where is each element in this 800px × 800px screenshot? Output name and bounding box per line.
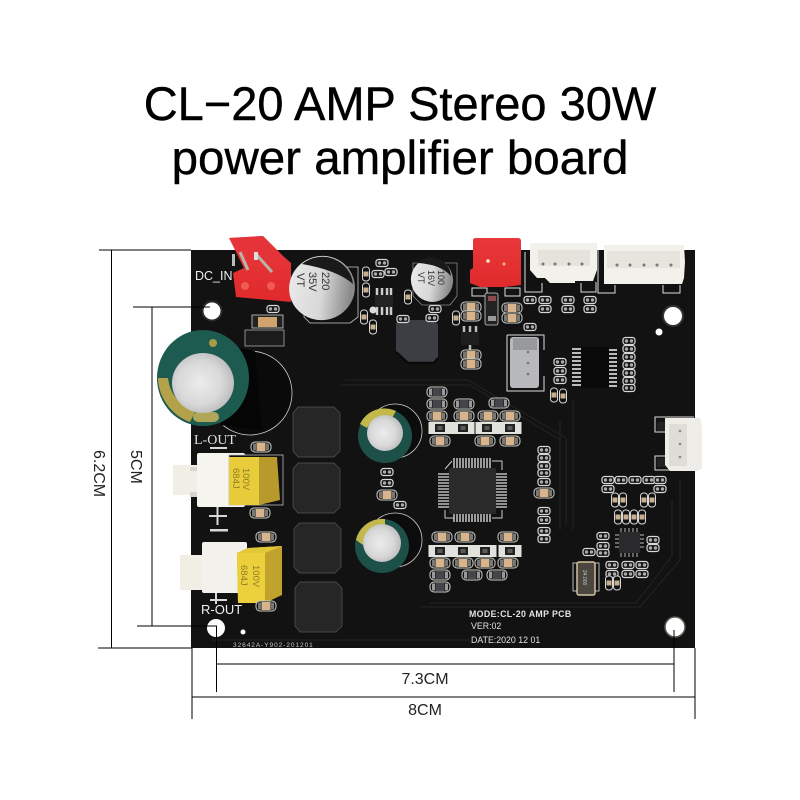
capacitor: 100uF 16V: VT bbox=[416, 272, 426, 284]
chip: crystal oscillator bbox=[573, 562, 599, 595]
panel: circuit board bbox=[157, 236, 702, 649]
capacitor: large green electrolytic bbox=[157, 330, 292, 435]
silkscreen: model block: MODE:CL-20 AMP PCB bbox=[469, 609, 572, 619]
diode and resistor below DC_IN bbox=[245, 306, 284, 346]
dimension: 5CM hole spacing: 5CM bbox=[127, 450, 144, 484]
capacitor: 220uF 35V: VT bbox=[294, 273, 306, 287]
capacitor: 100uF 16V bbox=[406, 253, 458, 307]
silkscreen: serial number: 32642A-Y902-201201 bbox=[233, 642, 314, 649]
title bbox=[144, 77, 657, 185]
SMD parts: upper amplifier cluster bbox=[427, 387, 522, 446]
silkscreen: model block: DATE:2020 12 01 bbox=[471, 635, 540, 645]
title: CL−20 AMP Stereo 30W bbox=[144, 77, 657, 130]
dimension: 5CM hole spacing bbox=[127, 307, 217, 626]
connector: white 4-pin bbox=[525, 243, 597, 292]
dimension: 7.3CM hole spacing bbox=[216, 626, 674, 692]
connector: right white 3-pin bbox=[655, 417, 702, 471]
capacitor: 220uF 35V: 35V bbox=[306, 272, 318, 292]
dimension: 7.3CM hole spacing: 7.3CM bbox=[401, 671, 449, 688]
output connector: R-OUT: 684J bbox=[238, 565, 249, 586]
output connector: L-OUT: 100V bbox=[240, 468, 251, 491]
title: power amplifier board bbox=[172, 132, 628, 185]
silkscreen: R-OUT label: R-OUT bbox=[201, 602, 242, 617]
connector: DC_IN red bbox=[229, 236, 291, 302]
silkscreen: DC_IN label: DC_IN bbox=[195, 269, 233, 283]
dimension: 8CM board width bbox=[192, 648, 695, 719]
output connector: L-OUT bbox=[173, 453, 283, 507]
silkscreen: polarity marks bbox=[209, 447, 228, 604]
chip: QFP processor bbox=[438, 458, 507, 522]
connector: grey socket bbox=[507, 335, 544, 391]
chip: SOP amplifier driver bbox=[572, 347, 617, 388]
output connector: R-OUT: 100V bbox=[250, 565, 261, 588]
connector: white 5-pin bbox=[598, 245, 685, 293]
inductors: power stage bbox=[293, 407, 342, 632]
silkscreen: model block: VER:02 bbox=[471, 621, 501, 631]
connector: top red bbox=[470, 238, 521, 296]
dimension: 6.2CM board height: 6.2CM bbox=[90, 450, 107, 497]
chip: large inductor top centre bbox=[396, 320, 438, 363]
SOT regulator parts bbox=[370, 288, 498, 350]
capacitor: 100uF 16V: 16V bbox=[426, 270, 436, 286]
chip: QFN codec bbox=[615, 528, 644, 557]
capacitor: small green upper bbox=[358, 404, 422, 463]
capacitor: 100uF 16V: 100 bbox=[436, 270, 446, 285]
chip: crystal oscillator: 24.000 bbox=[581, 570, 587, 586]
capacitor: small green lower bbox=[355, 513, 422, 573]
output connector: L-OUT: 684J bbox=[230, 468, 241, 489]
dimension: 6.2CM board height bbox=[90, 250, 192, 648]
output connector: R-OUT bbox=[180, 442, 282, 611]
mounting holes bbox=[202, 302, 685, 637]
traces bbox=[212, 380, 680, 640]
SMD parts: lower amplifier cluster bbox=[428, 532, 522, 592]
dimension: 8CM board width: 8CM bbox=[408, 702, 442, 719]
capacitor: 220uF 35V: 220 bbox=[319, 272, 331, 290]
capacitor: 220uF 35V bbox=[280, 247, 364, 329]
silkscreen: model block bbox=[469, 609, 572, 645]
SMD parts: column and grids bbox=[360, 260, 666, 590]
silkscreen: L-OUT label: L-OUT bbox=[194, 433, 236, 448]
